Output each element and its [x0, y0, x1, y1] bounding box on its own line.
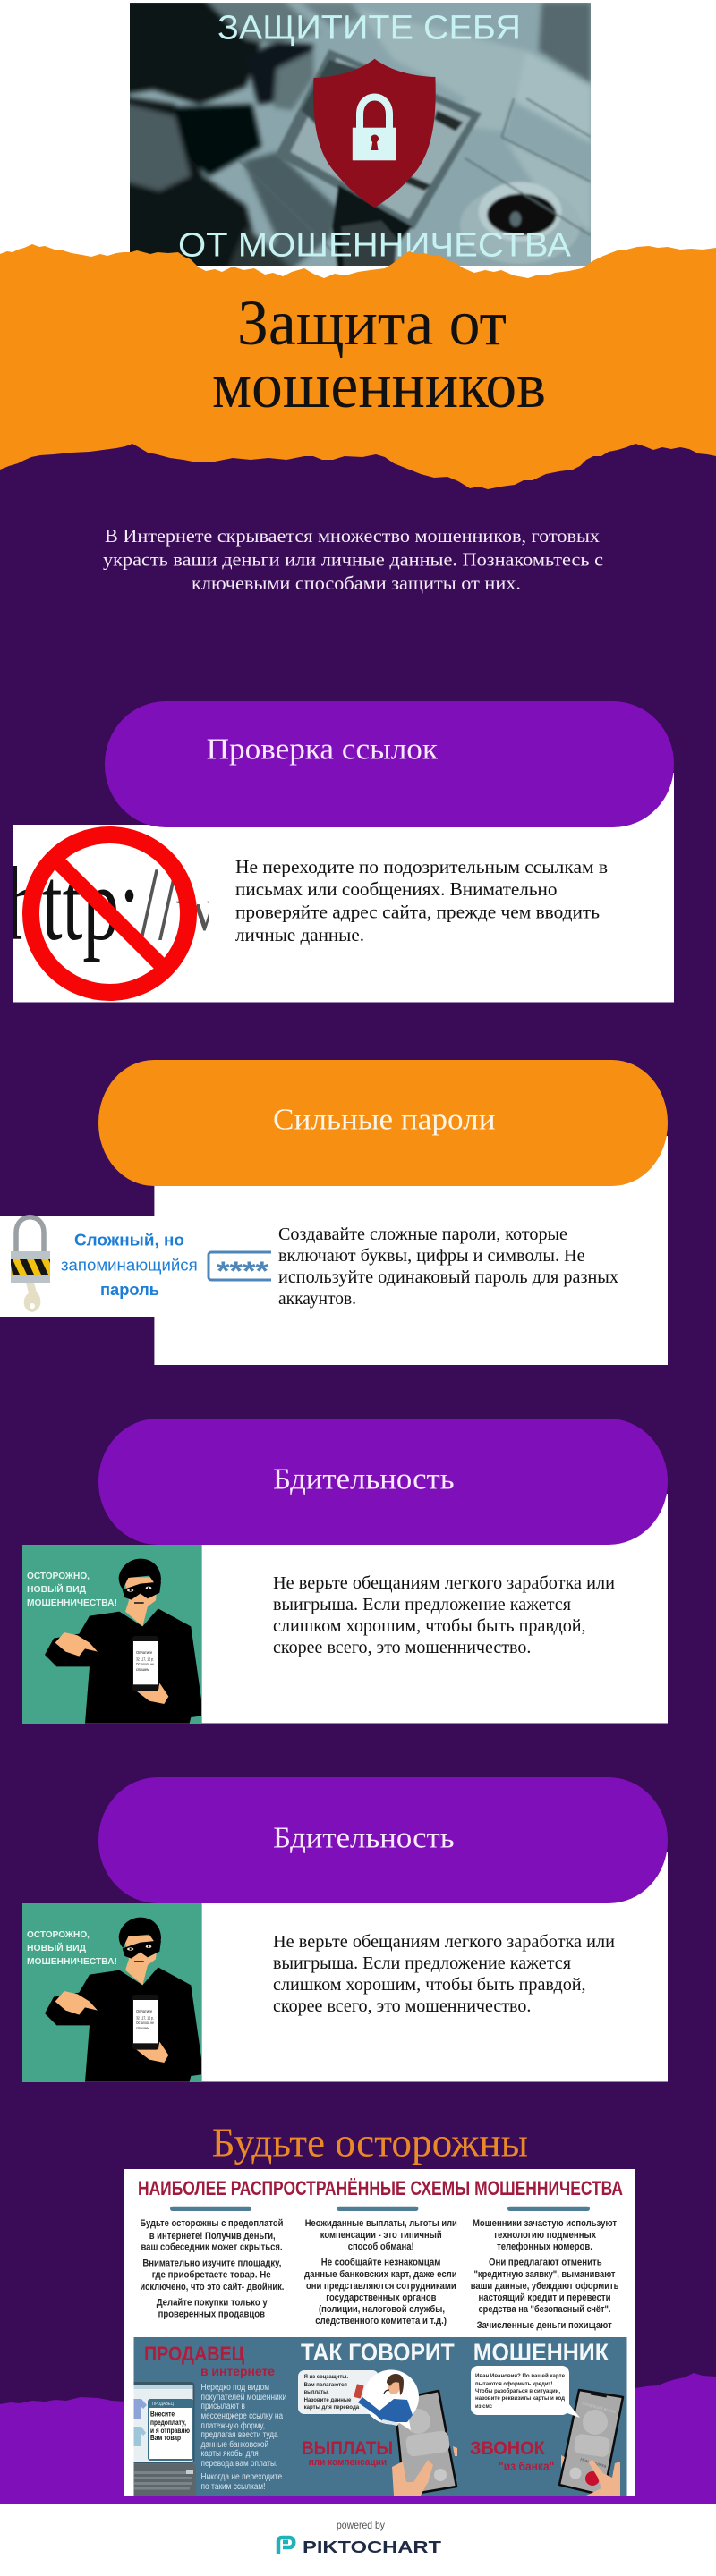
speech bubble: social security: выплаты. — [304, 2389, 329, 2395]
shield with padlock — [313, 59, 436, 208]
card background — [201, 1852, 668, 2082]
seller paragraph: данные банковской — [200, 2440, 268, 2450]
seller paragraph: карты якобы для — [200, 2449, 259, 2459]
hero heading top: ЗАЩИТИТЕ СЕБЯ — [217, 9, 521, 47]
intro text: ключевыми способами защиты от них. — [192, 572, 521, 594]
body text: используйте одинаковый пароль для разных — [278, 1267, 618, 1287]
image: masked fraudster: спишем — [136, 1667, 149, 1672]
speech bubble: social security: Я из соцзащиты. — [304, 2374, 348, 2380]
column 2 text: Неожиданные выплаты, льготы или — [305, 2218, 457, 2229]
image: masked fraudster: МОШЕННИЧЕСТВА! — [27, 1598, 117, 1608]
body text: письмах или сообщениях. Внимательно — [235, 878, 557, 900]
column 2 text: способ обмана! — [348, 2241, 414, 2252]
image: masked fraudster — [22, 1545, 202, 1724]
image: masked fraudster: НОВЫЙ ВИД — [27, 1943, 86, 1953]
image: masked fraudster — [22, 1903, 202, 2082]
body text — [278, 1224, 618, 1309]
password field: **** — [217, 1257, 268, 1286]
column 1 text: где приобретаете товар. Не — [152, 2270, 271, 2281]
speech bubble: social security: карты для перевода — [304, 2404, 359, 2411]
phone 2 with hand: Входящий вызов — [581, 2400, 617, 2415]
column 1 text: Внимательно изучите площадку, — [142, 2258, 281, 2269]
footer: powered by piktochart — [278, 2521, 441, 2556]
blue scheme panel: или компенсации — [309, 2457, 387, 2468]
speech bubble: bank — [471, 2366, 580, 2418]
image: masked fraudster: 32 117, 12 р. — [136, 1657, 154, 1662]
intro text — [103, 525, 603, 594]
pill heading — [98, 1777, 668, 1903]
image: masked fraudster: НОВЫЙ ВИД — [27, 1584, 86, 1595]
image: masked fraudster: спишем — [136, 2026, 149, 2030]
image: complex but memorable password — [0, 1216, 298, 1317]
seller paragraph: Никогда не переходите — [200, 2472, 283, 2482]
column 1 text: Делайте покупки только у — [157, 2298, 268, 2309]
image: masked fraudster: Осталось не — [136, 1662, 154, 1666]
column 3 text: технологию подменных — [493, 2230, 596, 2241]
seller headline: ПРОДАВЕЦ — [144, 2343, 244, 2365]
panel: vigilance 2 — [22, 1777, 668, 2082]
orange torn banner — [0, 244, 716, 489]
column 3 text: телефонных номеров. — [497, 2241, 592, 2252]
column 3 text: средства на "безопасный счёт". — [478, 2304, 610, 2315]
speech bubble: bank: Чтобы разобраться в ситуации, — [475, 2387, 560, 2394]
body text — [273, 1573, 615, 1657]
heading: so says the fraudster: ТАК ГОВОРИТ — [301, 2339, 455, 2366]
icon: no http sign — [13, 825, 209, 1002]
column bars — [170, 2207, 590, 2211]
image text: запоминающийся — [61, 1257, 198, 1275]
seller paragraph: перевода вам оплаты. — [200, 2459, 277, 2469]
seller paragraph: платежную форму, — [200, 2421, 265, 2431]
seller paragraph: по таким ссылкам! — [200, 2482, 265, 2492]
seller paragraph: Нередко под видом — [200, 2383, 269, 2393]
column 2 text — [304, 2218, 457, 2326]
column 3 text — [471, 2218, 619, 2331]
hero image: protect yourself from fraud — [130, 3, 591, 266]
speech bubble: bank: Иван Иванович? По вашей карте — [475, 2372, 565, 2379]
body text: слишком хорошим, чтобы быть правдой, — [273, 1616, 586, 1636]
body text: выигрыша. Если предложение кажется — [273, 1595, 571, 1614]
blue scheme panel: "из банка" — [499, 2459, 554, 2473]
speech bubble: bank: из смс — [475, 2403, 492, 2410]
embedded infographic: common fraud schemes — [124, 2169, 635, 2496]
column 2 text: Не сообщайте незнакомцам — [321, 2258, 440, 2268]
image text — [61, 1232, 198, 1299]
speech bubble: bank: назовите реквизиты карты и код — [475, 2395, 566, 2402]
panel: checking links — [5, 701, 674, 1002]
panel: vigilance 1 — [22, 1419, 668, 1724]
icon: no http sign: // — [140, 845, 177, 962]
blue scheme panel: в интернете — [200, 2364, 275, 2378]
laptop with seller message: Внесите — [150, 2410, 175, 2419]
icon: padlock and key — [11, 1217, 50, 1312]
body text: Не переходите по подозрительным ссылкам в — [235, 856, 608, 877]
body text: слишком хорошим, чтобы быть правдой, — [273, 1975, 586, 1995]
section heading: be careful: Будьте осторожны — [212, 2121, 528, 2165]
pill heading — [98, 1060, 668, 1186]
body text: скорее всего, это мошенничество. — [273, 1638, 531, 1657]
column 1 text: исключено, что это сайт- двойник. — [140, 2282, 284, 2292]
body text: Не верьте обещаниям легкого заработка или — [273, 1932, 615, 1952]
column 1 text: в интернете! Получив деньги, — [149, 2231, 276, 2241]
laptop with seller message: и я отправлю — [150, 2426, 190, 2435]
seller paragraph: мессенджере ссылку на — [200, 2411, 283, 2421]
seller paragraph: предлагая ввести туда — [200, 2430, 278, 2440]
column 3 text: Они предлагают отменить — [489, 2258, 602, 2268]
image: masked fraudster: Оплатите — [136, 2009, 153, 2013]
column 1 text: Будьте осторожны с предоплатой — [140, 2218, 283, 2229]
column 1 text: ваш собеседник может скрыться. — [141, 2242, 283, 2253]
column 2 text: компенсации - это типичный — [320, 2230, 442, 2241]
card background — [179, 773, 674, 1002]
panel: strong passwords — [0, 1060, 668, 1365]
icon: no http sign: http: — [5, 845, 140, 962]
phone 1 with hand — [392, 2391, 457, 2496]
body text: Создавайте сложные пароли, которые — [278, 1224, 567, 1244]
column 1 text — [140, 2218, 284, 2320]
column 2 text: следственного комитета и т.д.) — [315, 2316, 447, 2326]
column 3 text: Зачисленные деньги похищают — [477, 2320, 612, 2331]
photo: hands on a tablet on a table — [130, 3, 591, 266]
body text: аккаунтов. — [278, 1289, 356, 1309]
image: masked fraudster: МОШЕННИЧЕСТВА! — [27, 1957, 117, 1967]
laptop with seller message — [134, 2382, 196, 2496]
card background — [201, 1494, 668, 1723]
body text: личные данные. — [235, 924, 364, 945]
lower lighter purple torn band — [0, 2373, 716, 2504]
column 2 text: государственных органов — [326, 2292, 437, 2303]
main title — [212, 287, 546, 421]
speech bubble: bank: пытаются оформить кредит! — [475, 2381, 553, 2387]
body text — [273, 1932, 615, 2016]
body text: Не верьте обещаниям легкого заработка или — [273, 1573, 615, 1593]
laptop with seller message: ПРОДАВЕЦ — [152, 2402, 174, 2407]
image: masked fraudster: ОСТОРОЖНО, — [27, 1930, 90, 1940]
main title: Защита от — [237, 287, 507, 359]
intro text: В Интернете скрывается множество мошенников, готовых — [105, 525, 601, 547]
heading text: Сильные пароли — [273, 1104, 496, 1137]
pill heading — [98, 1419, 668, 1545]
footer: powered by piktochart: powered by — [337, 2521, 385, 2531]
operator portrait — [354, 2370, 419, 2430]
blue scheme panel — [125, 2337, 626, 2496]
seller paragraph: покупателей мошенники — [200, 2393, 286, 2402]
body text: скорее всего, это мошенничество. — [273, 1996, 531, 2016]
body text: проверяйте адрес сайта, прежде чем вводить — [235, 901, 600, 922]
column 3 text: Мошенники зачастую используют — [473, 2218, 617, 2229]
main title: мошенников — [212, 350, 546, 421]
card background — [154, 1136, 668, 1365]
footer: powered by piktochart: PIKTOCHART — [303, 2538, 441, 2556]
heading text: Проверка ссылок — [207, 733, 438, 767]
icon: piktochart logo — [278, 2538, 294, 2554]
column 3 text: настоящий кредит и перевести — [478, 2292, 610, 2303]
payouts headline: ВЫПЛАТЫ — [302, 2438, 393, 2459]
column 3 text: "кредитную заявку", выманивают — [474, 2269, 616, 2280]
laptop with seller message: предоплату, — [150, 2418, 186, 2427]
intro text: украсть ваши деньги или личные данные. Познакомьтесь с — [103, 549, 603, 571]
seller paragraph — [200, 2383, 286, 2492]
body text: включают буквы, цифры и символы. Не — [278, 1246, 585, 1266]
column 3 text: ваши данные, убеждают оформить — [471, 2281, 619, 2292]
speech bubble: social security: Вам полагаются — [304, 2382, 347, 2388]
image: masked fraudster: Осталось не — [136, 2021, 154, 2025]
laptop with seller message: Вам товар — [150, 2433, 181, 2442]
hero heading bottom: ОТ МОШЕННИЧЕСТВА — [178, 227, 572, 265]
heading text: Бдительность — [273, 1822, 455, 1855]
body text: выигрыша. Если предложение кажется — [273, 1953, 571, 1973]
column 1 text: проверенных продавцов — [158, 2309, 265, 2320]
heading text: Бдительность — [273, 1463, 455, 1496]
seller paragraph: присылают в — [200, 2402, 245, 2411]
column 2 text: данные банковских карт, даже если — [304, 2269, 457, 2280]
call headline: ЗВОНОК — [470, 2438, 545, 2459]
body text — [235, 856, 608, 945]
speech bubble: social security: Назовите данные — [304, 2397, 352, 2403]
phone 2 with hand — [559, 2390, 623, 2496]
blue scheme panel: МОШЕННИК — [473, 2339, 609, 2366]
image: masked fraudster: 32 117, 12 р. — [136, 2016, 154, 2021]
image: masked fraudster: Оплатите — [136, 1650, 153, 1655]
image text: Сложный, но — [74, 1232, 184, 1250]
speech bubble: social security — [298, 2370, 379, 2414]
column 2 text: они представляются сотрудниками — [306, 2281, 456, 2292]
pill heading — [105, 701, 674, 827]
icon: no http sign: w — [176, 876, 217, 945]
phone 2 with hand: Номер банка — [579, 2457, 607, 2470]
image text: пароль — [100, 1281, 159, 1299]
password field — [208, 1250, 271, 1281]
column 2 text: (полиции, налоговой службы, — [319, 2304, 445, 2315]
image: masked fraudster: ОСТОРОЖНО, — [27, 1572, 90, 1581]
